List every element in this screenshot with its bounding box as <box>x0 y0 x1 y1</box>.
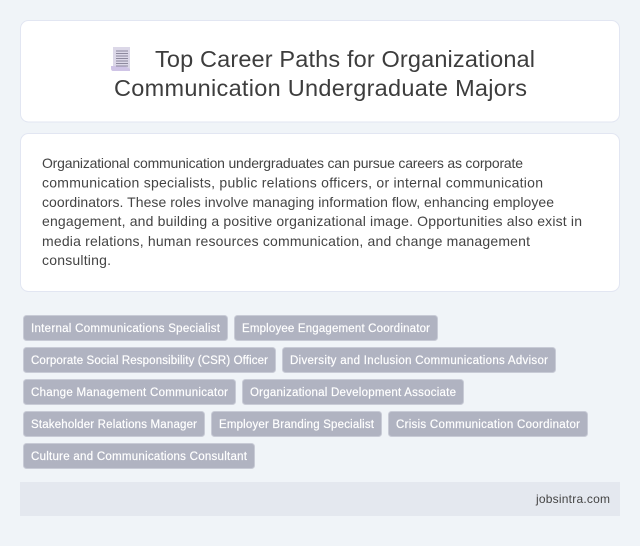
tag: Crisis Communication Coordinator <box>396 419 580 431</box>
tag: Change Management Communicator <box>31 387 228 399</box>
tag: Diversity and Inclusion Communications Advisor <box>290 355 548 367</box>
tag <box>212 412 382 436</box>
tag <box>282 348 556 372</box>
panel: title header <box>20 20 620 122</box>
text block: description: communication specialists, public relations officers, or internal communication <box>42 174 543 190</box>
tag: Culture and Communications Consultant <box>31 451 248 463</box>
title: Communication Undergraduate Majors <box>114 75 527 101</box>
tag <box>24 412 204 436</box>
tag <box>388 412 588 436</box>
panel: description <box>20 134 620 292</box>
tag: Internal Communications Specialist <box>31 323 221 335</box>
footer source text: jobsintra.com <box>535 492 610 506</box>
title <box>114 46 535 101</box>
tag <box>24 444 254 468</box>
tag <box>242 380 464 404</box>
title: Top Career Paths for Organizational <box>155 46 535 72</box>
tag <box>234 316 438 340</box>
tag: Stakeholder Relations Manager <box>31 419 197 431</box>
text block: description: coordinators. These roles involve managing information flow, enhancing employee <box>42 194 554 210</box>
tags: career paths <box>24 316 588 468</box>
tag <box>24 316 228 340</box>
text block: description: consulting. <box>42 252 111 268</box>
footer <box>20 482 620 516</box>
text block: description <box>42 155 582 268</box>
text block: description: media relations, human resources communication, and change management <box>42 233 530 249</box>
tag: Corporate Social Responsibility (CSR) Officer <box>31 355 268 367</box>
tag <box>24 380 236 404</box>
tag: Employee Engagement Coordinator <box>242 323 430 335</box>
icon: document scroll <box>111 47 130 71</box>
tag: Organizational Development Associate <box>250 387 456 399</box>
tag: Employer Branding Specialist <box>219 419 375 431</box>
tag <box>24 348 276 372</box>
text block: description: engagement, and building a positive organizational image. Opportunities also exist in <box>42 213 582 229</box>
text block: description: Organizational communication undergraduates can pursue careers as corporate <box>42 155 523 171</box>
